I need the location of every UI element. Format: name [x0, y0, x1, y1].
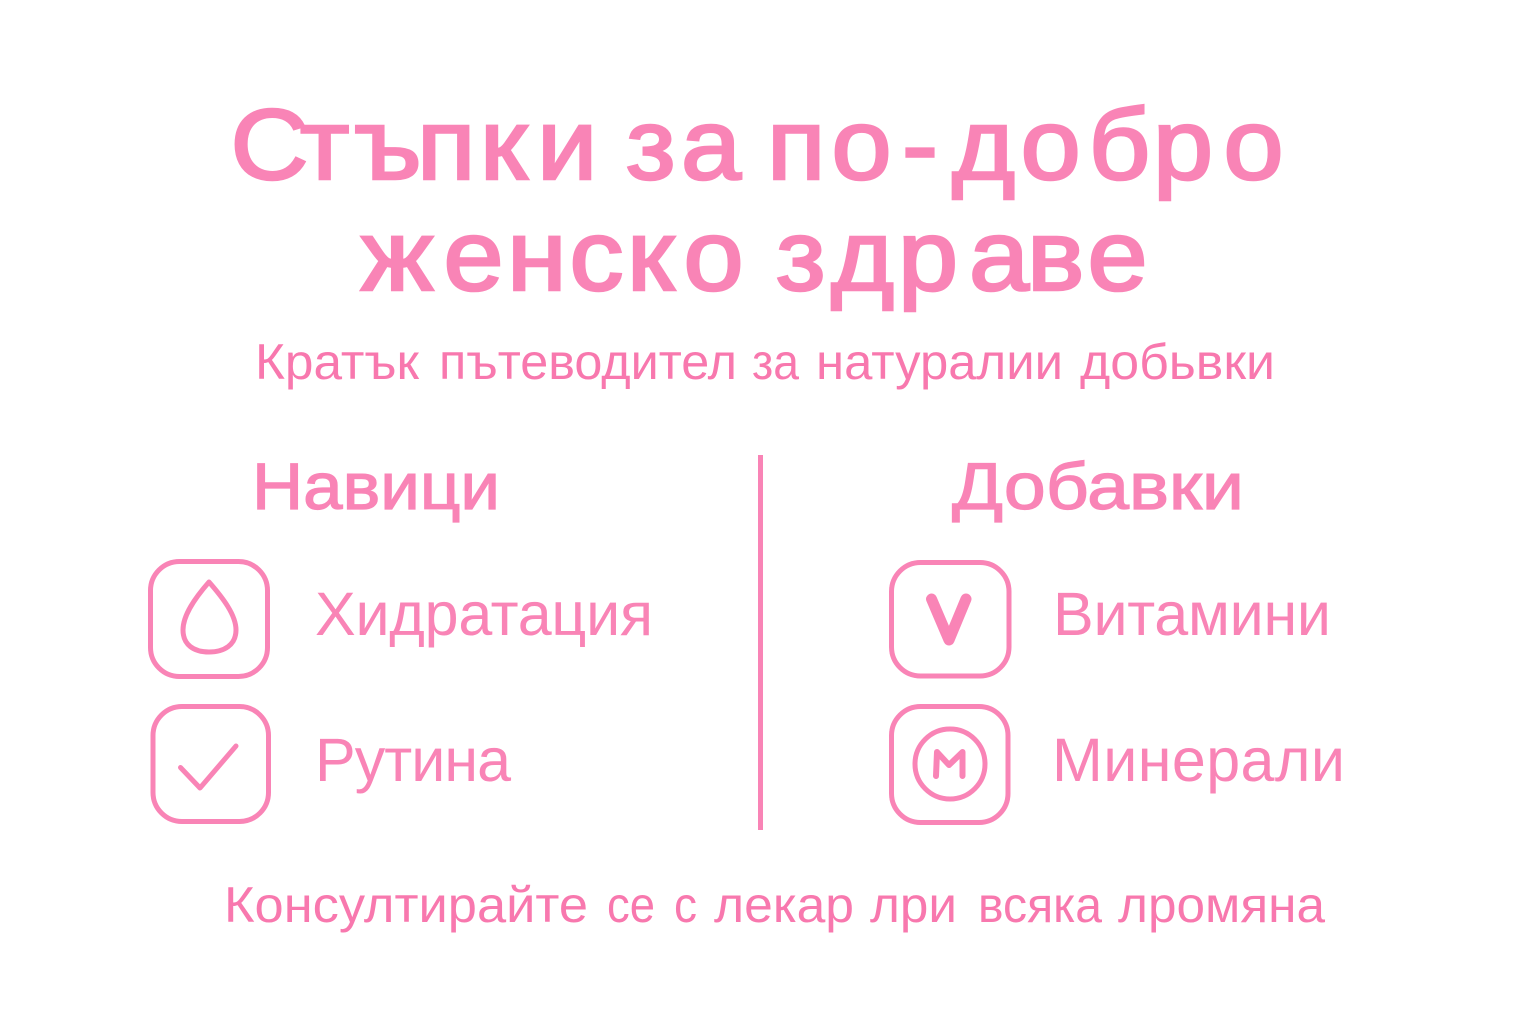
title: по-добро — [767, 90, 1284, 201]
subtitle: натуралии — [816, 334, 1063, 390]
footer note: всяка — [978, 877, 1102, 933]
title: за — [626, 90, 741, 201]
label: routine: Рутина — [315, 726, 511, 794]
subtitle — [255, 334, 1275, 390]
heading: habits: Навици — [252, 449, 500, 523]
icon: vitamin V — [892, 562, 1009, 676]
title — [230, 90, 1284, 312]
footer note: лекар — [714, 877, 854, 933]
divider — [758, 455, 763, 830]
title: Стъпки — [230, 90, 597, 201]
subtitle: Кратък — [255, 334, 420, 390]
footer note — [224, 877, 1325, 933]
icon: mineral M — [892, 706, 1008, 822]
panel: supplements — [892, 449, 1345, 822]
subtitle: добьвки — [1080, 334, 1275, 390]
label: minerals: Минерали — [1052, 726, 1345, 794]
icon: water drop — [150, 562, 268, 676]
heading: supplements: Добавки — [952, 449, 1244, 523]
label: vitamins: Витамини — [1053, 580, 1331, 648]
footer note: с — [674, 877, 697, 933]
footer note: лри — [870, 877, 957, 933]
subtitle: пътеводител — [439, 334, 737, 390]
footer note: Консултирайте — [224, 877, 588, 933]
title: здраве — [776, 201, 1148, 312]
panel: habits — [150, 449, 653, 822]
footer note: се — [607, 877, 655, 933]
subtitle: за — [752, 334, 799, 390]
footer note: лромяна — [1118, 877, 1325, 933]
title: женско — [361, 201, 744, 312]
icon: check mark — [153, 706, 268, 822]
label: hydration: Хидратация — [315, 580, 653, 648]
